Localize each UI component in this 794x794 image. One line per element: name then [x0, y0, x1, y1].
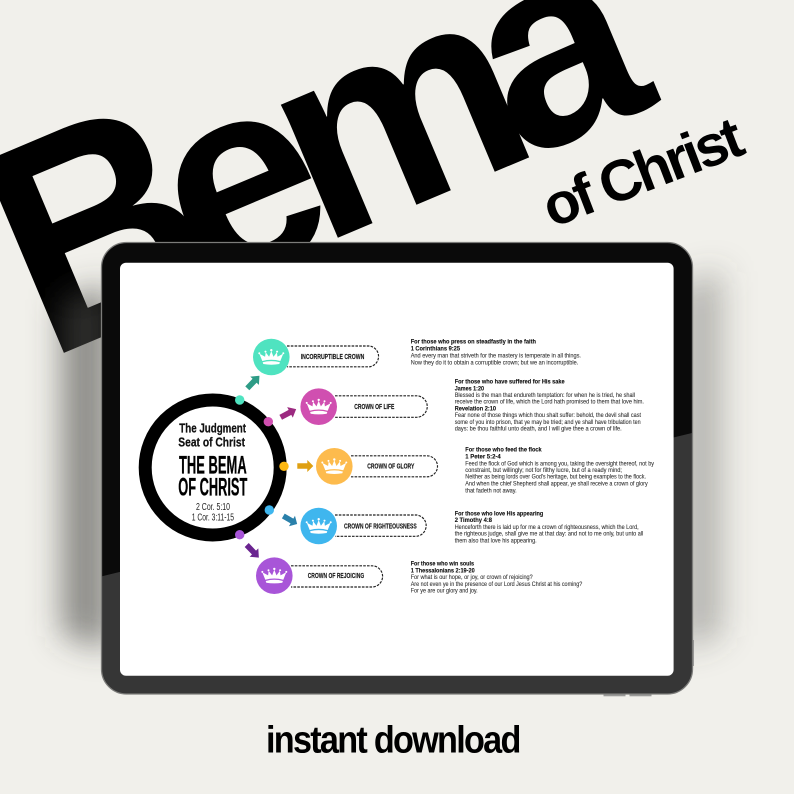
hub subtitle: The Judgment [179, 421, 246, 436]
text block: crown of glory: that fadeth not away. [465, 487, 517, 494]
text block: crown of life: Blessed is the man that endureth temptation: for when he is tried, he shall [455, 392, 635, 399]
label pill [335, 396, 427, 417]
text block: incorruptible crown: 1 Corinthians 9:25 [411, 345, 460, 352]
text block: crown of life: Revelation 2:10 [455, 405, 496, 412]
label pill: CROWN OF GLORY [367, 464, 415, 471]
crown branch: incorruptible [235, 339, 379, 405]
hub subtitle [178, 421, 246, 449]
label pill: CROWN OF REJOICING [308, 573, 365, 580]
text block: incorruptible crown: And every man that striveth for the mastery is temperate in all things. [411, 352, 581, 359]
crown icon [316, 448, 353, 485]
text block: crown of rejoicing [411, 561, 583, 595]
hub references: 1 Cor. 3:11-15 [192, 513, 234, 524]
arrow [297, 460, 313, 472]
heading: Bema [0, 0, 687, 420]
crown branch: life [264, 388, 427, 426]
text block: crown of life: Fear none of those things which thou shalt suffer: behold, the devil shall cast [455, 412, 641, 419]
text block: crown of glory [465, 447, 655, 494]
arrow [278, 404, 299, 423]
text block: crown of rejoicing: For those who win souls [411, 561, 474, 568]
label pill [335, 515, 426, 536]
hub title: THE BEMA [179, 451, 247, 479]
text block: crown of rejoicing: For ye are our glory and joy. [411, 588, 478, 595]
arrow [242, 541, 263, 562]
text block: incorruptible crown: Now they do it to obtain a corruptible crown; but we an incorruptible. [411, 359, 578, 366]
crown branch: righteousness [265, 505, 426, 544]
crown icon [256, 557, 293, 594]
text block: crown of life: James 1:20 [455, 385, 484, 392]
label pill: CROWN OF RIGHTEOUSNESS [344, 523, 417, 530]
crown branch: glory [279, 448, 438, 485]
text block: crown of righteousness: For those who love His appearing [455, 510, 543, 517]
hub title: OF CHRIST [178, 474, 247, 502]
crown branch: rejoicing [235, 530, 383, 594]
text block: crown of life: days: be thou faithful unto death, and I will give thee a crown of life. [455, 426, 622, 433]
text block: incorruptible crown [411, 339, 581, 366]
arrow [243, 372, 264, 392]
label pill: INCORRUPTIBLE CROWN [301, 354, 364, 361]
text block: crown of rejoicing: Are not even ye in the presence of our Lord Jesus Christ at his coming? [411, 581, 583, 588]
tablet shadow [62, 270, 722, 650]
text block: crown of glory: For those who feed the flock [465, 447, 542, 454]
text block: crown of rejoicing: For what is our hope, or joy, or crown of rejoicing? [411, 574, 533, 581]
label pill [291, 566, 383, 587]
hub title [178, 451, 247, 502]
hub subtitle: Seat of Christ [178, 434, 246, 449]
text block: crown of righteousness: Henceforth there is laid up for me a crown of righteousness, which the Lord, [455, 524, 639, 531]
text block: crown of righteousness: them also that love his appearing. [455, 537, 537, 544]
label pill [351, 456, 438, 477]
text block: crown of life: some of you into prison, that ye may be tried; and ye shall have tribulation ten [455, 419, 641, 426]
crown icon [300, 388, 337, 425]
hub references [192, 502, 234, 524]
crown icon [300, 508, 337, 544]
text block: crown of glory: Neither as being lords over God's heritage, but being examples to the flock. [465, 474, 646, 481]
text block: crown of glory: constraint, but willingly; not for filthy lucre, but of a ready mind; [465, 467, 622, 474]
text block: crown of life: receive the crown of life, which the Lord hath promised to them that love him. [455, 399, 644, 406]
tablet [95, 242, 700, 700]
hub references: 2 Cor. 5:10 [196, 502, 230, 513]
tablet screen [120, 263, 674, 676]
text block: crown of glory: 1 Peter 5:2-4 [465, 453, 501, 460]
text block: crown of life: For those who have suffered for His sake [455, 379, 565, 386]
text block: crown of righteousness: the righteous judge, shall give me at that day: and not to me only, but unto all [455, 531, 644, 538]
text block: crown of glory: And when the chief Shepherd shall appear, ye shall receive a crown of glory [465, 480, 648, 487]
caption: instant download: instant download [266, 718, 520, 761]
text block: incorruptible crown: For those who press on steadfastly in the faith [411, 339, 536, 346]
label pill [287, 346, 379, 367]
diagram hub: The Bema of Christ [145, 400, 280, 535]
text block: crown of glory: Feed the flock of God which is among you, taking the oversight thereof, not by [465, 460, 655, 467]
arrow [280, 511, 300, 529]
subheading: of Christ: of Christ [533, 104, 752, 240]
text block: crown of righteousness [455, 510, 644, 544]
text block: crown of life [455, 379, 644, 433]
label pill: CROWN OF LIFE [354, 404, 395, 411]
crown icon [253, 339, 290, 375]
text block: crown of rejoicing: 1 Thessalonians 2:19-20 [411, 567, 475, 574]
text block: crown of righteousness: 2 Timothy 4:8 [455, 517, 492, 524]
